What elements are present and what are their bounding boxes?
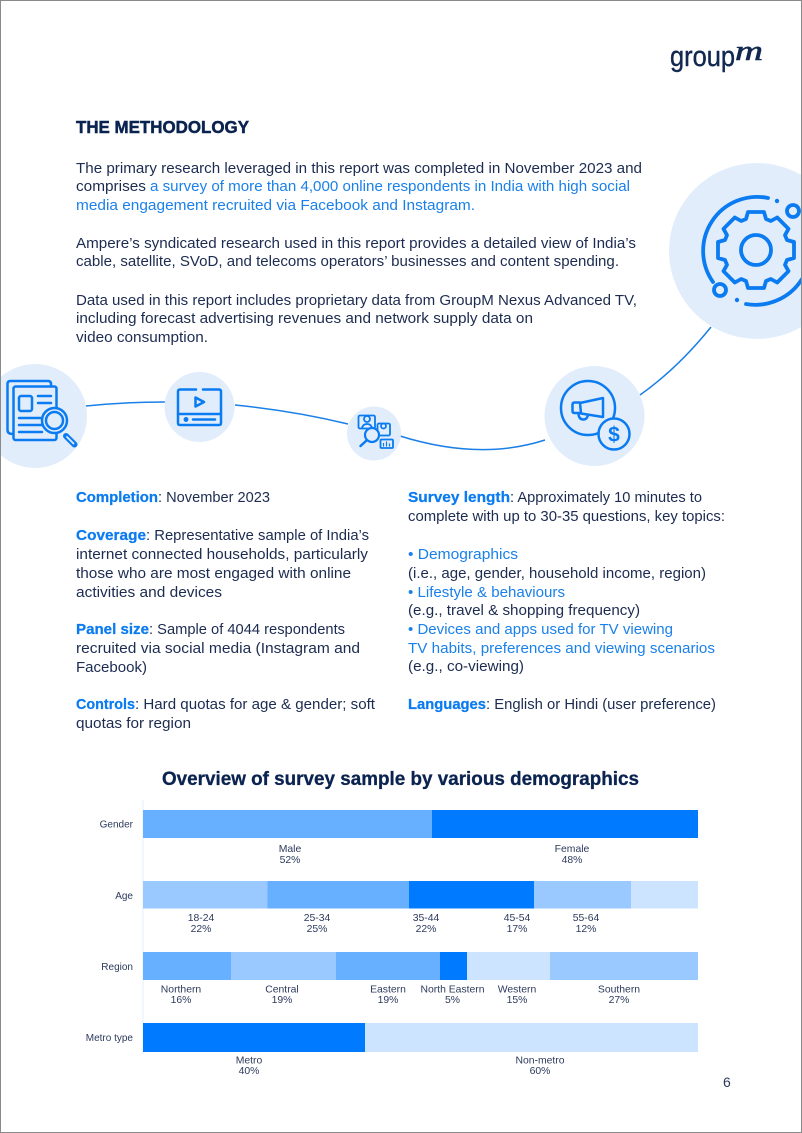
row: age: 55-64 [573,913,600,924]
row: metro type: Metro type [86,1033,133,1044]
title: the methodology: THE METHODOLOGY [76,117,249,137]
row: age: Age [115,891,133,902]
row: age: 22% [191,924,211,935]
row: region [101,952,698,1006]
text block: survey details left: Panel size [76,621,149,638]
text block: survey details right: (e.g., travel & shopping frequency) [408,602,640,619]
text block: survey details right: • Demographics [408,546,518,563]
row: gender: Gender [100,820,134,830]
row: gender: 48% [562,855,582,866]
row: region: Western [498,984,536,996]
text block: methodology intro: video consumption. [76,329,208,346]
row: metro type: Non-metro [515,1056,565,1066]
logo: groupM: group [670,41,735,73]
row: region: Eastern [370,984,406,996]
row: region: Northern [161,984,201,996]
text block: survey details right: Survey length [408,489,510,506]
icon: audience research [347,406,401,460]
row: region: Southern [598,984,640,996]
text block: survey details right: Languages [408,696,486,713]
row: gender: Female [555,844,590,855]
text block: survey details left: recruited via social media (Instagram and [76,640,360,657]
text block: survey details left: activities and devices [76,584,222,601]
text block: methodology intro: including forecast advertising revenues and network supply data on [76,310,533,327]
text block: survey details right: : Approximately 10 minutes to [510,489,702,506]
text block: survey details left: Controls [76,696,135,713]
row: metro type: 60% [530,1066,550,1077]
text block: survey details left: quotas for region [76,715,191,732]
text block: methodology intro: The primary research leveraged in this report was completed in November 2023 and [76,160,642,177]
row: gender: 52% [280,855,300,866]
text block: survey details right: (i.e., age, gender, household income, region) [408,565,706,582]
logo: groupM [670,35,763,73]
icon: documents with magnifier [0,364,87,468]
row: age: 18-24 [188,913,215,924]
row: region: North Eastern [420,984,485,996]
row: gender [100,810,698,866]
row: age: 22% [416,924,436,935]
icon: video player [164,372,234,442]
text block: survey details left: : Representative sample of India’s [146,527,369,544]
row: age: 12% [576,924,596,935]
text block: methodology intro: Data used in this report includes proprietary data from GroupM Nexus Advanced TV, [76,292,637,309]
text block: methodology intro [76,160,642,346]
text block: survey details left: internet connected households, particularly [76,546,368,563]
row: metro type: 40% [239,1066,259,1077]
text block: methodology intro: a survey of more than 4,000 online respondents in India with high social [150,178,630,195]
row: region: 16% [171,995,191,1006]
row: age: 25% [307,924,327,935]
row: region: Region [101,962,133,973]
text block: methodology intro: cable, satellite, SVoD, and telecoms operators’ businesses and content spending. [76,253,619,270]
text block: survey details left [76,489,376,732]
icon: megaphone and dollar: $ [608,424,620,446]
text block: survey details right: complete with up to 30-35 questions, key topics: [408,508,725,525]
row: region: 19% [272,995,292,1006]
text block: survey details left: : Sample of 4044 respondents [149,621,345,638]
row: age [115,881,698,935]
text block: methodology intro: comprises [76,178,146,195]
row: gender: Male [279,844,301,855]
icon: megaphone and dollar [544,366,644,466]
row: region: 27% [609,995,629,1006]
text block: survey details right [408,489,725,713]
text block: survey details right: TV habits, preferences and viewing scenarios [408,640,715,657]
row: region: Central [265,984,299,996]
text block: survey details left: Completion [76,489,158,506]
text block: survey details right: (e.g., co-viewing) [408,658,524,675]
row: metro type: Metro [236,1056,262,1066]
row: age: 17% [507,924,527,935]
text block: survey details left: those who are most engaged with online [76,565,351,582]
icon: gear [669,163,802,339]
text block: methodology intro: media engagement recruited via Facebook and Instagram. [76,197,475,214]
text block: survey details left: Facebook) [76,659,147,676]
chart title: Overview of survey sample by various demographics [162,768,639,790]
text block: survey details right: • Lifestyle & behaviours [408,584,565,601]
stacked bar chart [86,800,698,1077]
row: region: 15% [507,995,527,1006]
page number: 6 [723,1074,731,1090]
row: region: 5% [445,995,460,1006]
row: age: 35-44 [413,913,440,924]
connector line [86,327,711,450]
row: metro type [86,1023,698,1077]
text block: survey details right: • Devices and apps used for TV viewing [408,621,673,638]
text block: survey details left: Coverage [76,527,146,544]
text block: survey details left: : Hard quotas for age & gender; soft [135,696,376,713]
row: age: 45-54 [504,913,531,924]
text block: survey details left: : November 2023 [158,489,270,506]
row: region: 19% [378,995,398,1006]
row: age: 25-34 [304,913,331,924]
text block: survey details right: : English or Hindi (user preference) [486,696,716,713]
logo: groupM: m [735,35,763,67]
text block: methodology intro: Ampere’s syndicated research used in this report provides a detailed view of India’s [76,235,636,252]
